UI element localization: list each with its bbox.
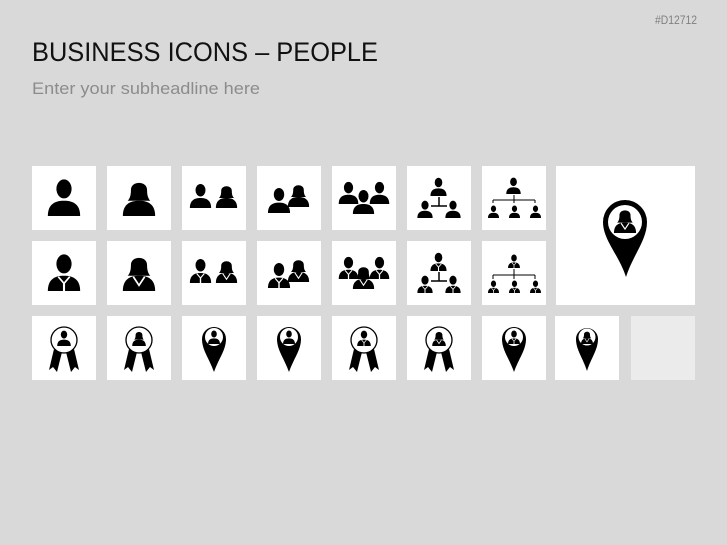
- icon: business group: [332, 241, 396, 305]
- icon: businesswoman: [107, 241, 171, 305]
- icon: pin woman: [257, 316, 321, 380]
- icon: pin businessman: [482, 316, 546, 380]
- icon: business org chart: [407, 241, 471, 305]
- icon: man: [32, 166, 96, 230]
- icon: award man: [32, 316, 96, 380]
- icon: pin man: [182, 316, 246, 380]
- title: BUSINESS ICONS – PEOPLE: [32, 37, 378, 67]
- icon: award businessman: [332, 316, 396, 380]
- row 1: [32, 166, 546, 230]
- big tile: location pin businesswoman: [556, 166, 695, 305]
- icon: couple: [182, 166, 246, 230]
- icon: award woman: [107, 316, 171, 380]
- icon: business couple: [182, 241, 246, 305]
- icon: businessman: [32, 241, 96, 305]
- icon: couple overlapped: [257, 166, 321, 230]
- icon: org chart 2: [482, 166, 546, 230]
- icon: woman: [107, 166, 171, 230]
- icon: org chart: [407, 166, 471, 230]
- icon grid: [32, 166, 695, 380]
- row 2: [32, 241, 546, 305]
- subheadline: Enter your subheadline here: [32, 79, 260, 98]
- empty tile: [631, 316, 695, 380]
- icon: pin businesswoman: [555, 316, 619, 380]
- icon: business couple overlapped: [257, 241, 321, 305]
- icon: business org chart 2: [482, 241, 546, 305]
- icon: award businesswoman: [407, 316, 471, 380]
- code label: #D12712: [655, 13, 697, 27]
- icon: group: [332, 166, 396, 230]
- row 3: [32, 316, 695, 380]
